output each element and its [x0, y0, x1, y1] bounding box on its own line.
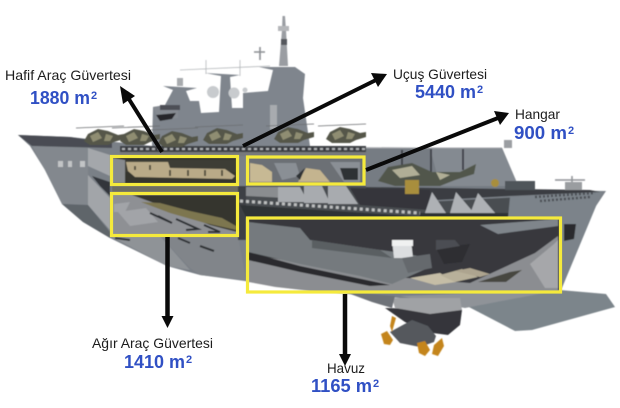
label: Ağır Araç Güvertesi 1410 m2: 1410 m: [124, 352, 185, 372]
middle lower band: [238, 186, 520, 218]
label: Hangar 900 m2: Hangar: [515, 106, 560, 122]
label: Hafif Araç Güvertesi 1880 m2: 1880 m: [30, 88, 90, 108]
white gap under hull: [248, 282, 310, 291]
label: Havuz 1165 m2: 2: [373, 378, 379, 390]
lower hull skeg: [385, 308, 462, 335]
label: Uçuş Güvertesi 5440 m2: 2: [477, 84, 483, 96]
label: Hafif Araç Güvertesi 1880 m2: [5, 67, 131, 108]
highlight box: Havuz: [248, 218, 560, 292]
well dock interior: [248, 219, 560, 291]
vehicle deck interior: [112, 157, 237, 184]
highlight box: Hafif Araç Güvertesi: [112, 156, 238, 184]
label: Hangar 900 m2: 2: [568, 125, 574, 137]
arrow: Ağır Araç Güvertesi: [162, 237, 174, 328]
arrow: Hafif Araç Güvertesi: [120, 86, 162, 152]
deck edge: [120, 146, 366, 152]
masts: [279, 16, 288, 66]
label: Havuz 1165 m2: Havuz: [327, 360, 365, 376]
aft helicopter: [378, 163, 476, 186]
propulsion pod: [390, 320, 436, 347]
right side panel: [508, 192, 602, 290]
label: Ağır Araç Güvertesi 1410 m2: 2: [186, 354, 192, 366]
aft deck equipment: [505, 181, 535, 190]
big white triangles: [425, 192, 496, 214]
small triangle row: [240, 201, 420, 213]
label: Uçuş Güvertesi 5440 m2: 5440 m: [415, 82, 476, 102]
arrow: Havuz: [339, 294, 351, 366]
label: Havuz 1165 m2: [311, 360, 379, 396]
highlight box: Hangar: [248, 157, 364, 184]
heavy vehicle deck interior: [112, 194, 237, 235]
aft deck band: [365, 187, 600, 204]
label: Hafif Araç Güvertesi 1880 m2: 2: [91, 90, 97, 102]
stern ramp: [465, 290, 615, 331]
arrow: Hangar: [366, 111, 509, 170]
small boats: [410, 273, 456, 285]
label: Ağır Araç Güvertesi 1410 m2: [92, 335, 213, 372]
label: Hangar 900 m2: [514, 106, 574, 143]
main hull: [18, 135, 606, 298]
bow deck band: [18, 135, 112, 148]
label: Hafif Araç Güvertesi 1880 m2: Hafif Araç Güvertesi: [5, 67, 131, 83]
hangar interior: [248, 158, 363, 183]
label: Uçuş Güvertesi 5440 m2: Uçuş Güvertesi: [393, 66, 487, 82]
lower bow facets: [110, 236, 190, 270]
label: Havuz 1165 m2: 1165 m: [311, 376, 372, 396]
highlight box: Ağır Araç Güvertesi: [112, 194, 238, 236]
label: Uçuş Güvertesi 5440 m2: [393, 66, 487, 102]
helicopters on deck: [76, 126, 124, 145]
superstructure: [152, 67, 310, 146]
hangar aft upper side: [366, 148, 520, 190]
label: Hangar 900 m2: 900 m: [514, 123, 567, 143]
arrow: Uçuş Güvertesi: [243, 73, 387, 146]
label: Ağır Araç Güvertesi 1410 m2: Ağır Araç Güvertesi: [92, 335, 213, 351]
landing craft: [248, 222, 430, 284]
